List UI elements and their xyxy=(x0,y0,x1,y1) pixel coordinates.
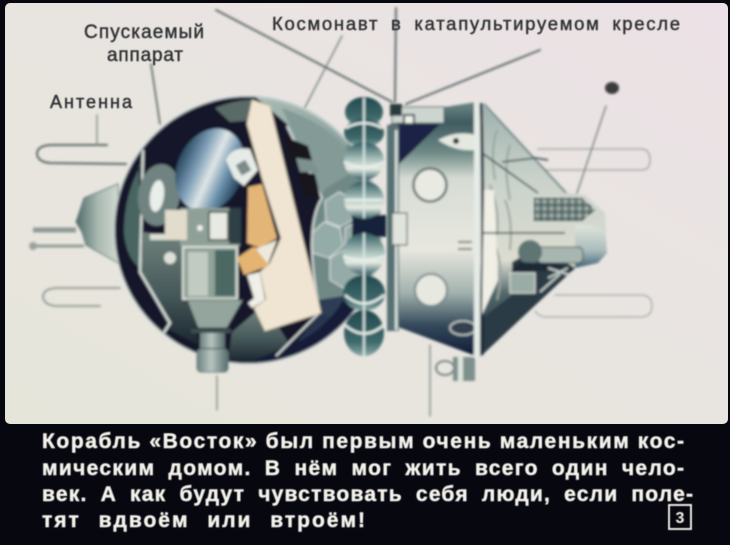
cutaway dark interior xyxy=(112,94,322,366)
antenna: upper right loop xyxy=(535,149,650,170)
left collar strip xyxy=(387,125,399,331)
pointer: descent module label xyxy=(151,64,160,124)
lower interior shadow right xyxy=(228,310,290,362)
dark top wedge xyxy=(390,124,440,165)
lower hatch ellipse xyxy=(450,321,476,335)
caption line 3: век. А как будут чувствовать себя люди, если поле- xyxy=(42,483,693,506)
clamp xyxy=(392,213,407,245)
caption line 4: тят вдвоём или втроём! xyxy=(42,509,365,532)
page number box: 3 xyxy=(676,510,685,527)
black equipment boxes xyxy=(284,136,320,198)
label: descent module: Спускаемый xyxy=(84,22,204,43)
ejection capsule helmet shape xyxy=(162,117,258,223)
inner hull white lines xyxy=(140,150,170,334)
rear rods xyxy=(29,230,84,250)
speck near right pointer xyxy=(605,82,619,94)
ball seams xyxy=(363,98,365,358)
upper porthole xyxy=(414,168,446,202)
service module xyxy=(387,102,476,356)
nose tail block xyxy=(575,225,607,268)
descent module sphere xyxy=(112,94,390,372)
viewport hatch lip xyxy=(438,133,476,150)
cosmonaut thigh xyxy=(237,247,268,275)
lower porthole xyxy=(415,274,447,306)
cosmonaut head xyxy=(226,148,258,186)
heat shield hexagons xyxy=(296,142,382,343)
illustration paper panel xyxy=(5,3,728,424)
internal struts xyxy=(482,153,565,233)
equipment box xyxy=(183,247,237,299)
cone rim band xyxy=(484,104,566,193)
pointer: antenna label xyxy=(96,115,98,145)
antenna: upper left loop xyxy=(37,145,126,164)
sphere shell xyxy=(115,97,381,363)
highlight at top of hull xyxy=(215,100,256,122)
instrument cone xyxy=(474,102,607,358)
upper right grey wall xyxy=(282,108,348,187)
central divider dark xyxy=(481,103,483,355)
label: antenna: Антенна xyxy=(50,92,133,112)
antenna: lower left loop xyxy=(43,288,120,306)
sensor dot xyxy=(453,138,459,144)
antennas and pointer lines xyxy=(37,8,652,416)
central divider white xyxy=(474,102,480,358)
tank xyxy=(512,240,583,272)
pointer: right side antenna xyxy=(576,106,606,196)
strut cross xyxy=(540,268,570,292)
labels xyxy=(50,13,680,112)
lower right dark crescent xyxy=(250,305,350,362)
dark backing xyxy=(352,215,386,237)
hatch ring xyxy=(134,161,184,229)
pointer: cosmonaut label xyxy=(275,36,342,165)
cone rib highlights xyxy=(482,190,498,315)
lower cone shadow xyxy=(480,246,575,357)
page number box xyxy=(669,505,691,529)
small bracket mark xyxy=(458,242,472,249)
caption line 1: Корабль «Восток» был первым очень маленьким кос- xyxy=(42,430,684,453)
lower whips xyxy=(217,345,430,416)
left crescent patch xyxy=(124,165,141,268)
seat xyxy=(247,100,321,331)
bottom fitting xyxy=(436,357,475,383)
instrument panel xyxy=(150,208,241,264)
small top bracket xyxy=(390,104,444,124)
antenna: top whips xyxy=(216,8,540,104)
parachute container balls xyxy=(343,97,386,358)
cone ribs xyxy=(490,130,511,300)
label: apparatus: аппарат xyxy=(107,45,183,66)
caption xyxy=(42,430,693,532)
grid panel xyxy=(533,197,597,222)
caption line 2: мическим домом. В нём мог жить всего один чело- xyxy=(42,457,684,480)
antenna: lower right loop xyxy=(535,295,652,317)
cosmonaut xyxy=(226,148,277,308)
label: cosmonaut in ejection seat: Космонавт в катапультируемом кресле xyxy=(272,13,680,34)
cone body xyxy=(478,102,607,358)
box unit xyxy=(510,273,535,293)
spacecraft illustration xyxy=(29,8,652,416)
lower interior shadow left xyxy=(141,232,198,345)
cosmonaut torso xyxy=(247,184,277,248)
service module body xyxy=(387,102,476,356)
rear cone xyxy=(76,184,120,264)
cosmonaut legs xyxy=(247,272,265,308)
retro nozzle xyxy=(187,300,243,372)
